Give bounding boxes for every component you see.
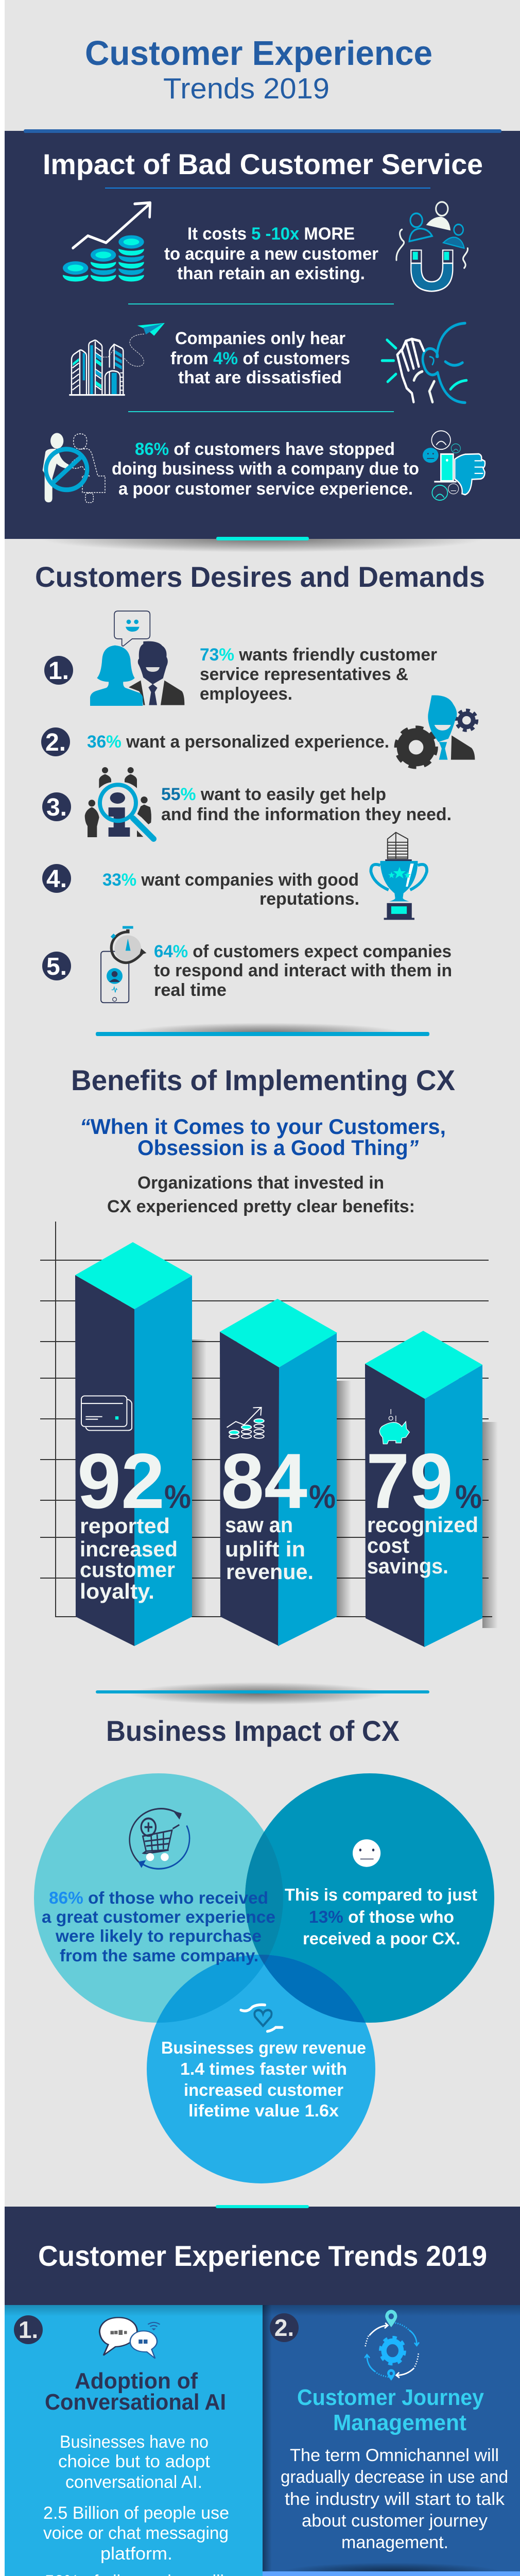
- text: 13 percent poor cx: 13% of those who: [309, 1907, 454, 1926]
- bar: 92 percent: reported: [80, 1514, 170, 1538]
- text: companies only hear: Companies only hear: [175, 329, 345, 348]
- panel: impact of bad customer service: [5, 129, 520, 539]
- text: 13 percent poor cx: [285, 1885, 477, 1948]
- text: revenue growth: lifetime value 1.6x: [188, 2101, 339, 2120]
- quote: Obsession is a Good Thing”: [137, 1136, 419, 1160]
- text: 13 percent poor cx: This is compared to just: [285, 1885, 477, 1904]
- text: costs: It costs 5 -10x MORE: [187, 224, 355, 244]
- text: item 1: 73% wants friendly customer: [200, 645, 437, 665]
- heading: impact: Impact of Bad Customer Service: [43, 148, 483, 180]
- bar: 92 percent: 92: [77, 1437, 165, 1525]
- heading: adoption: Conversational AI: [45, 2389, 226, 2415]
- bar: 92 percent: customer: [80, 1557, 175, 1582]
- icon: person with prohibition sign: [43, 433, 105, 503]
- text: costs: [164, 224, 378, 283]
- text: revenue growth: Businesses grew revenue: [161, 2038, 366, 2057]
- text: item 5: to respond and interact with them in: [154, 961, 452, 980]
- heading: desires: Customers Desires and Demands: [35, 561, 485, 593]
- badge 1: 1.: [19, 2316, 38, 2343]
- text: 86 percent repurchase: from the same company.: [60, 1946, 258, 1965]
- text: item 3: 55% want to easily get help: [161, 785, 386, 804]
- item 5 badge: [42, 952, 71, 980]
- item 4 badge: 4.: [46, 866, 67, 893]
- bar: 79 percent: recognized: [367, 1513, 478, 1537]
- text: 86 percent repurchase: were likely to repurchase: [55, 1926, 262, 1945]
- text: card 1 body: conversational AI.: [65, 2472, 202, 2492]
- text: costs: than retain an existing.: [177, 264, 365, 283]
- title: Customer Experience: [85, 34, 432, 73]
- bar: 84 percent: uplift in: [225, 1537, 305, 1561]
- text: card 1 body: platform.: [100, 2544, 172, 2564]
- quote: “When it Comes to your Customers,: [80, 1114, 446, 1139]
- card 2: customer journey management: [263, 2305, 520, 2576]
- bar: 79 percent: cost: [367, 1533, 409, 1557]
- text: item 5: [154, 942, 452, 1000]
- icon: office buildings and paper plane: [69, 323, 165, 395]
- text: 86 percent stopped: 86% of customers have stopped: [135, 439, 395, 459]
- text: card 1 body: choice but to adopt: [58, 2452, 211, 2471]
- item 2 badge: [41, 727, 70, 756]
- bar: 92 percent: [75, 1242, 192, 1646]
- text: 86 percent repurchase: 86% of those who received: [49, 1888, 268, 1907]
- text: card 2 body: gradually decrease in use and: [281, 2467, 508, 2487]
- text: 86 percent repurchase: [42, 1888, 275, 1965]
- text: card 2 body: management.: [341, 2533, 448, 2552]
- card 4: putting mobile first: [263, 2571, 520, 2576]
- heading: business impact: Business Impact of CX: [106, 1715, 400, 1747]
- icon: man with gears: [396, 695, 477, 767]
- text: companies only hear: [170, 329, 350, 387]
- text: 86 percent stopped: [112, 439, 419, 499]
- icon: shopping cart in cycle: [130, 1809, 189, 1869]
- item 3 badge: 3.: [46, 794, 67, 821]
- text: card 2 body: about customer journey: [302, 2511, 488, 2531]
- bar: 84 percent: %: [309, 1478, 336, 1515]
- icon: thumbs down and faces: [423, 431, 485, 500]
- icon: trophy with building: [371, 833, 427, 919]
- icon: neutral face: [353, 1839, 380, 1867]
- icon: magnet and people: [396, 202, 467, 291]
- text: item 3: and find the information they need.: [161, 805, 452, 824]
- heading: journey: Customer Journey: [297, 2385, 484, 2410]
- bar: 84 percent: 84: [221, 1437, 307, 1525]
- text: card 1 body: Businesses have no: [60, 2432, 209, 2452]
- bar: 79 percent: 79: [366, 1437, 453, 1525]
- venn diagram: [34, 1773, 494, 2183]
- panel shadow under impact panel: [41, 526, 484, 552]
- heading: benefits: Benefits of Implementing CX: [71, 1064, 455, 1096]
- icon: heart with squiggles: [241, 2005, 282, 2031]
- badge 2: 2.: [274, 2314, 294, 2341]
- divider bar above business impact: [96, 1682, 429, 1705]
- bar: 79 percent: savings.: [367, 1554, 448, 1578]
- item 5 badge: 5.: [46, 953, 67, 980]
- text: card 1 body: [43, 2432, 229, 2576]
- item 3 badge: [42, 792, 71, 821]
- bar: 84 percent: revenue.: [226, 1560, 314, 1584]
- text: card 1 body: 2.5 Billion of people use: [43, 2503, 229, 2523]
- bar: 79 percent: [365, 1331, 482, 1647]
- icon: hand cupped to ear: [382, 323, 466, 403]
- icon: people with magnifier and information symbol: [85, 767, 153, 839]
- item 1 badge: [44, 656, 73, 685]
- panel: business impact of cx: [34, 1715, 494, 2183]
- text: item 2: 36% want a personalized experience.: [87, 732, 389, 752]
- heading: trends: Customer Experience Trends 2019: [38, 2240, 487, 2272]
- text: card 2 body: The term Omnichannel will: [290, 2446, 499, 2465]
- icon: coins and rising arrow: [63, 202, 150, 281]
- bar: 92 percent: %: [164, 1478, 191, 1515]
- text: revenue growth: 1.4 times faster with: [180, 2059, 347, 2078]
- card 1: conversational ai: [5, 2305, 263, 2576]
- panel: benefits of implementing cx: [40, 1064, 498, 1647]
- title: [85, 34, 432, 105]
- panel: customers desires and demands: [35, 561, 485, 1003]
- panel: customer experience trends: [5, 2205, 520, 2576]
- item 1 badge: 1.: [48, 657, 69, 685]
- text: organizations: CX experienced pretty clear benefits:: [107, 1197, 415, 1216]
- icon: friendly woman and man with speech bubble: [90, 611, 184, 706]
- bar: 84 percent: saw an: [225, 1513, 293, 1537]
- text: organizations: Organizations that invested in: [137, 1173, 384, 1193]
- divider bar above benefits: [5, 1023, 520, 1045]
- text: companies only hear: from 4% of customers: [170, 349, 350, 368]
- text: 13 percent poor cx: received a poor CX.: [303, 1929, 460, 1948]
- text: 86 percent stopped: doing business with a company due to: [112, 459, 419, 479]
- heading: journey: Management: [333, 2410, 466, 2435]
- text: item 4: 33% want companies with good: [102, 870, 359, 890]
- icon: phone and stopwatch: [101, 926, 146, 1003]
- text: 86 percent repurchase: a great customer experience: [42, 1907, 275, 1926]
- text: costs: to acquire a new customer: [164, 244, 378, 264]
- text: companies only hear: that are dissatisfied: [178, 368, 342, 387]
- text: item 3: [161, 785, 452, 824]
- text: item 4: reputations.: [259, 889, 359, 909]
- text: organizations: [107, 1173, 415, 1216]
- text: item 5: real time: [154, 980, 227, 1000]
- text: card 1 body: voice or chat messaging: [43, 2523, 229, 2543]
- heading: adoption: [45, 2368, 226, 2415]
- heading: adoption: Adoption of: [75, 2368, 198, 2394]
- bar: 92 percent: loyalty.: [80, 1579, 154, 1603]
- heading: journey: [297, 2385, 484, 2435]
- badge 1: [14, 2315, 43, 2344]
- text: item 1: [200, 645, 437, 704]
- text: item 4: [102, 870, 359, 909]
- text: revenue growth: increased customer: [184, 2080, 343, 2099]
- item 2 badge: 2.: [45, 729, 66, 756]
- quote: [80, 1114, 446, 1160]
- badge 2: [270, 2313, 299, 2342]
- bar: 79 percent: %: [455, 1478, 482, 1515]
- text: card 2 body: the industry will start to talk: [285, 2489, 505, 2509]
- title: Trends 2019: [163, 72, 330, 105]
- bar: 92 percent: increased: [80, 1537, 178, 1561]
- text: item 1: service representatives &: [200, 665, 408, 684]
- text: card 2 body: [281, 2446, 508, 2552]
- text: item 5: 64% of customers expect companies: [154, 942, 452, 961]
- icon: speech bubbles: [99, 2317, 160, 2359]
- bar: 84 percent: [220, 1299, 337, 1646]
- text: item 1: employees.: [200, 684, 292, 704]
- bar chart: [40, 1222, 498, 1647]
- text: 86 percent stopped: a poor customer service experience.: [118, 479, 413, 499]
- item 4 badge: [42, 864, 71, 893]
- text: revenue growth: [161, 2038, 366, 2120]
- icon: journey cycle with gear: [365, 2310, 419, 2381]
